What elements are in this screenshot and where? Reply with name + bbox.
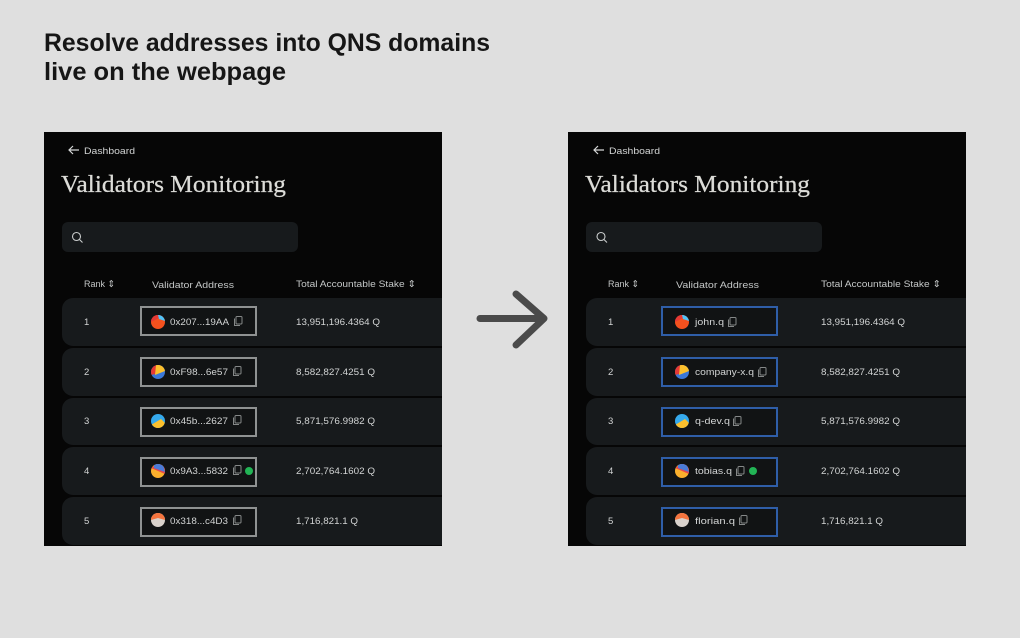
row 1: 1 [608,317,613,328]
search bar [62,222,298,252]
row 3: q-dev.q [695,416,730,427]
row 2: 8,582,827.4251 Q [296,367,375,378]
row 1: 0x207...19AA [170,317,230,328]
row 5: 0x318...c4D3 [170,516,228,527]
table header: Validator Address [152,280,234,291]
row 5: 5 [608,516,613,527]
row 2 [62,348,462,396]
row 3 [62,398,462,445]
row 3: 5,871,576.9982 Q [821,416,900,427]
row 4: 2,702,764.1602 Q [296,466,375,477]
table header: Rank ⇕ [608,279,639,290]
row 5: 5 [84,516,89,527]
row 4: 4 [84,466,89,477]
row 3: 3 [84,416,89,427]
panel: addresses before resolving [44,132,462,546]
row 5 [586,497,986,545]
table header [608,280,939,288]
row 3: 0x45b...2627 [170,416,228,427]
row 4: 4 [608,466,613,477]
title: live on the webpage [44,58,286,86]
arrow [480,294,544,345]
row 2: company-x.q [695,367,754,378]
row 5: 1,716,821.1 Q [821,516,883,527]
table header: Rank ⇕ [84,279,115,290]
back link [593,146,660,154]
page heading: Validators Monitoring [61,171,286,198]
row 2: 8,582,827.4251 Q [821,367,900,378]
row 5: florian.q [695,516,735,527]
row 1 [586,298,986,346]
search bar [586,222,822,252]
back link: Dashboard [609,146,660,157]
page heading: Validators Monitoring [585,171,810,198]
table header: Total Accountable Stake ⇕ [821,279,941,290]
back link [68,146,134,154]
table header: Total Accountable Stake ⇕ [296,279,416,290]
row 5: 1,716,821.1 Q [296,516,358,527]
title: Resolve addresses into QNS domains [44,29,490,57]
row 2 [586,348,986,396]
row 2: 0xF98...6e57 [170,367,228,378]
panel: resolved QNS domains [568,132,986,546]
title [44,29,490,86]
table header: Validator Address [676,280,759,291]
row 4: 0x9A3...5832 [170,466,228,477]
row 3 [586,398,986,445]
row 1: john.q [694,317,724,328]
row 3: 5,871,576.9982 Q [296,416,375,427]
row 4 [62,447,462,495]
back link: Dashboard [84,146,135,157]
row 1 [62,298,462,346]
row 1: 13,951,196.4364 Q [296,317,380,328]
row 4: 2,702,764.1602 Q [821,466,900,477]
row 1: 13,951,196.4364 Q [821,317,905,328]
row 1: 1 [84,317,89,328]
row 5 [62,497,462,545]
row 4: tobias.q [695,466,732,477]
row 2: 2 [84,367,89,378]
row 3: 3 [608,416,613,427]
row 4 [586,447,986,495]
row 2: 2 [608,367,613,378]
table header [84,280,414,288]
